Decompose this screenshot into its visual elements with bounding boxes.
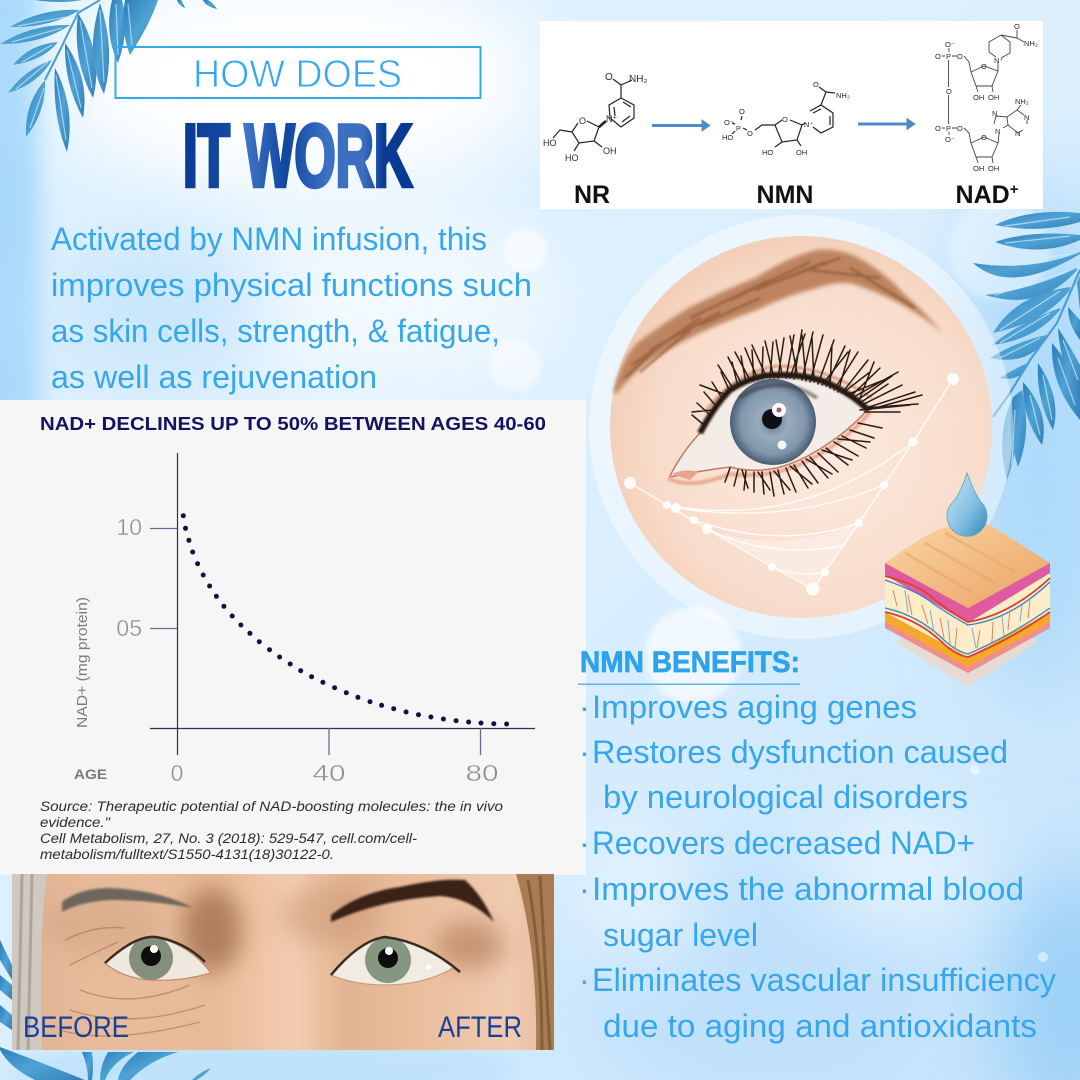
eyelashes <box>692 330 922 496</box>
molecule: NAD+: O <box>981 62 987 71</box>
arrow: NMN to NAD+ <box>858 120 913 128</box>
molecule: NR: OH <box>603 146 616 156</box>
after eye <box>331 937 460 985</box>
label: before: BEFORE <box>23 1011 129 1044</box>
y axis labels: 05 <box>116 615 142 641</box>
before brow <box>62 888 193 912</box>
benefits list: Eliminates vascular insufficiency <box>592 962 1057 998</box>
molecule: NAD+: O <box>957 124 963 133</box>
molecule: NAD+: NH₂ <box>1015 97 1029 106</box>
molecule: NAD+: O <box>981 133 987 142</box>
chart heading: NAD+ DECLINES UP TO 50% BETWEEN AGES 40-60 <box>40 413 546 434</box>
molecule: NR <box>543 72 647 163</box>
y axis labels <box>75 514 142 728</box>
benefits list: Improves the abnormal blood <box>592 871 1024 907</box>
molecule: NR: O <box>579 116 586 126</box>
title: it work: IT WORK <box>183 106 412 205</box>
x axis labels <box>74 760 498 786</box>
label: NAD+: NAD <box>956 181 1010 209</box>
y axis labels: NAD+ (mg protein) <box>75 597 91 728</box>
molecule: NAD+ <box>935 22 1038 173</box>
eye photo circle <box>589 215 1013 639</box>
molecule: NMN: O <box>813 80 819 89</box>
molecule: NMN: N⁺ <box>804 120 813 129</box>
molecule: NMN: P <box>736 124 741 133</box>
arrow: NR to NMN <box>652 122 708 129</box>
icon: palm frond top-left <box>0 0 217 152</box>
molecule: NR: O <box>605 72 613 83</box>
heading: NMN benefits: NMN BENEFITS: <box>580 646 800 679</box>
molecule: NMN: OH <box>796 148 807 157</box>
molecule: NAD+: P <box>946 124 951 133</box>
before eye <box>60 928 211 1036</box>
x axis labels: AGE <box>74 766 107 782</box>
source citation: Source: Therapeutic potential of NAD-boosting molecules: the in vivo <box>40 799 504 814</box>
chart axes <box>150 453 535 755</box>
after hair <box>516 874 554 1050</box>
intro paragraph <box>51 221 532 395</box>
under-eye lift lines <box>624 373 959 596</box>
benefits list: due to aging and antioxidants <box>603 1008 1037 1044</box>
molecule: NAD+: O <box>1014 22 1020 31</box>
molecule: NAD+: O <box>957 52 963 61</box>
molecule: NAD+: OH <box>988 93 999 102</box>
molecule: NAD+: P <box>946 52 951 61</box>
label: after: AFTER <box>438 1011 522 1044</box>
intro paragraph: Activated by NMN infusion, this <box>51 221 487 257</box>
molecule: NAD+: N⁺ <box>994 56 1003 65</box>
label: NAD+: + <box>1010 181 1019 198</box>
molecule: NAD+: OH <box>988 164 999 173</box>
molecule: NMN <box>722 80 850 157</box>
source citation: Cell Metabolism, 27, No. 3 (2018): 529-547, cell.com/cell- <box>40 831 418 846</box>
molecule: NAD+: N <box>992 109 997 118</box>
molecule: NMN: O⁻ <box>724 118 734 127</box>
title: how does <box>116 47 480 98</box>
molecule: NAD+: OH <box>973 164 984 173</box>
intro paragraph: improves physical functions such <box>51 267 532 303</box>
label: NMN: NMN <box>757 181 813 209</box>
molecule: NMN: O <box>782 115 788 124</box>
benefits list: · <box>579 734 590 770</box>
source citation <box>40 799 504 862</box>
molecule: NAD+: N <box>995 127 1000 136</box>
benefits list: · <box>579 962 590 998</box>
icon: palm frond right <box>973 212 1080 480</box>
intro paragraph: as well as rejuvenation <box>51 359 377 395</box>
x axis labels: 40 <box>312 760 346 786</box>
benefits list: · <box>579 825 590 861</box>
molecule: NAD+: NH₂ <box>1024 39 1038 48</box>
intro paragraph: as skin cells, strength, & fatigue, <box>51 313 500 349</box>
title: how does: HOW DOES <box>193 53 402 96</box>
molecule: NAD+: O <box>935 52 941 61</box>
molecule: NAD+: O <box>935 124 941 133</box>
x axis labels: 80 <box>466 760 498 786</box>
panel: molecule pathway <box>540 21 1043 209</box>
molecule: NR: N⁺ <box>606 114 617 124</box>
icon: skin layers with water drop <box>885 473 1050 687</box>
benefits list <box>579 689 1057 1044</box>
before and after photo <box>12 874 554 1050</box>
molecule: NMN: O <box>747 129 753 138</box>
panel: NAD+ decline chart <box>0 400 586 875</box>
molecule: NAD+: O <box>946 87 952 96</box>
icon: palm fronds bottom-left <box>0 940 211 1080</box>
y axis labels: 10 <box>116 514 142 540</box>
label: NR: NR <box>574 181 610 209</box>
molecule: NR: HO <box>543 138 556 148</box>
icon: water drop <box>947 473 987 536</box>
source citation: evidence." <box>40 815 111 830</box>
before hair <box>12 874 47 1050</box>
benefits list: · <box>579 871 590 907</box>
eye <box>668 366 872 483</box>
eyebrow <box>613 250 943 393</box>
molecule: NR: NH₂ <box>629 74 647 85</box>
benefits list: Recovers decreased NAD+ <box>592 825 975 861</box>
molecule: NMN: HO <box>722 133 733 142</box>
after brow <box>331 880 494 922</box>
molecule: NMN: NH₂ <box>836 91 850 100</box>
benefits list: sugar level <box>603 917 758 953</box>
molecule: NMN: O <box>739 107 745 116</box>
molecule: NMN: HO <box>762 148 773 157</box>
molecule: NAD+: O⁻ <box>945 40 955 49</box>
dotted decline curve <box>181 513 509 726</box>
molecule: NAD+: O⁻ <box>945 135 955 144</box>
benefits list: by neurological disorders <box>603 779 968 815</box>
molecule: NAD+: N <box>1024 113 1029 122</box>
benefits list: · <box>579 689 590 725</box>
benefits list: Restores dysfunction caused <box>592 734 1008 770</box>
benefits list: Improves aging genes <box>592 689 917 725</box>
molecule: NR: HO <box>565 153 578 163</box>
x axis labels: 0 <box>171 760 183 786</box>
source citation: metabolism/fulltext/S1550-4131(18)30122-0. <box>40 847 334 862</box>
molecule: NAD+: N <box>1015 129 1020 138</box>
molecule: NAD+: OH <box>973 93 984 102</box>
